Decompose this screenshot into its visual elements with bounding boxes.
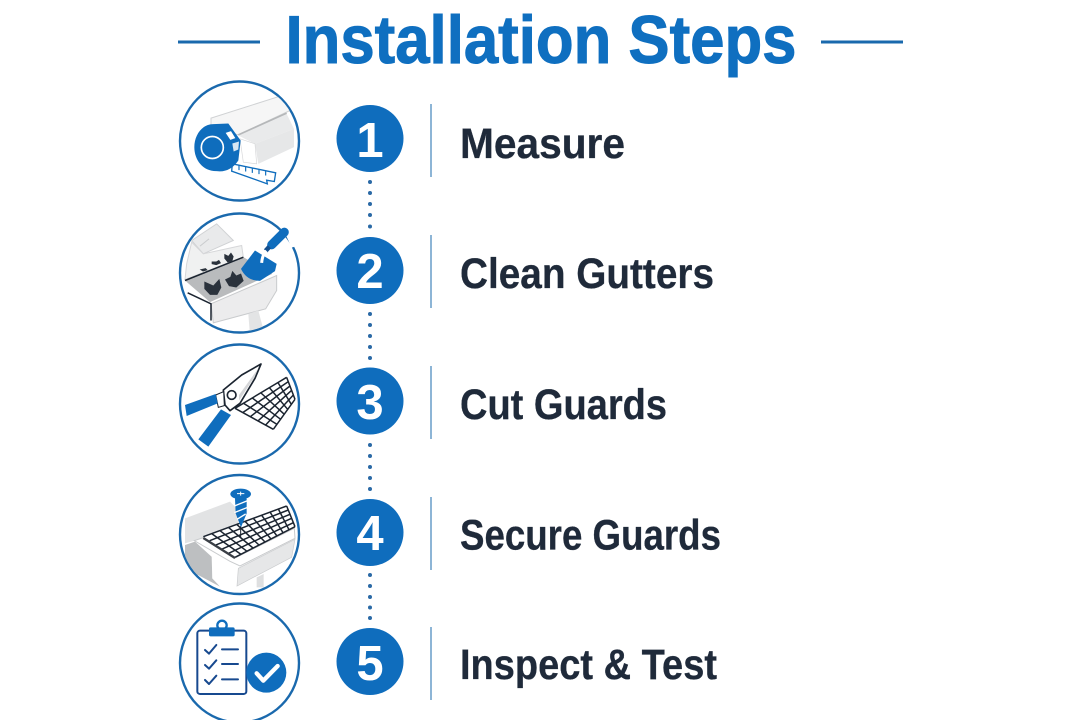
connector dots 1 to 2 bbox=[368, 180, 372, 228]
step 4: number bbox=[336, 499, 404, 566]
step 5: number: 5 bbox=[356, 637, 384, 691]
step 3: number: 3 bbox=[356, 376, 384, 430]
step 1: label: Measure bbox=[460, 120, 625, 168]
step 5: number bbox=[336, 628, 404, 695]
step 2: label: Clean Gutters bbox=[460, 250, 714, 298]
icon: trowel cleaning gutter bbox=[180, 214, 299, 335]
title: Installation Steps bbox=[286, 2, 796, 78]
step 1: number: 1 bbox=[356, 114, 384, 168]
step 2: number: 2 bbox=[356, 245, 384, 299]
icon: snips cutting mesh bbox=[180, 344, 299, 464]
step 5: label: Inspect & Test bbox=[460, 641, 717, 689]
icon: screw securing guard bbox=[180, 475, 299, 594]
step 2: number bbox=[336, 237, 404, 304]
step 4: label: Secure Guards bbox=[460, 512, 721, 560]
connector dots 4 to 5 bbox=[368, 573, 372, 620]
step 3: number bbox=[336, 368, 404, 434]
connector dots 2 to 3 bbox=[368, 312, 372, 360]
step 3: label: Cut Guards bbox=[460, 381, 667, 429]
infographic: installation steps bbox=[178, 14, 903, 720]
step 1: number bbox=[336, 105, 404, 172]
icon: clipboard checklist bbox=[180, 604, 299, 720]
step 4: number: 4 bbox=[356, 507, 384, 561]
connector dots 3 to 4 bbox=[368, 443, 372, 491]
icon: tape measure on gutter bbox=[180, 82, 299, 200]
